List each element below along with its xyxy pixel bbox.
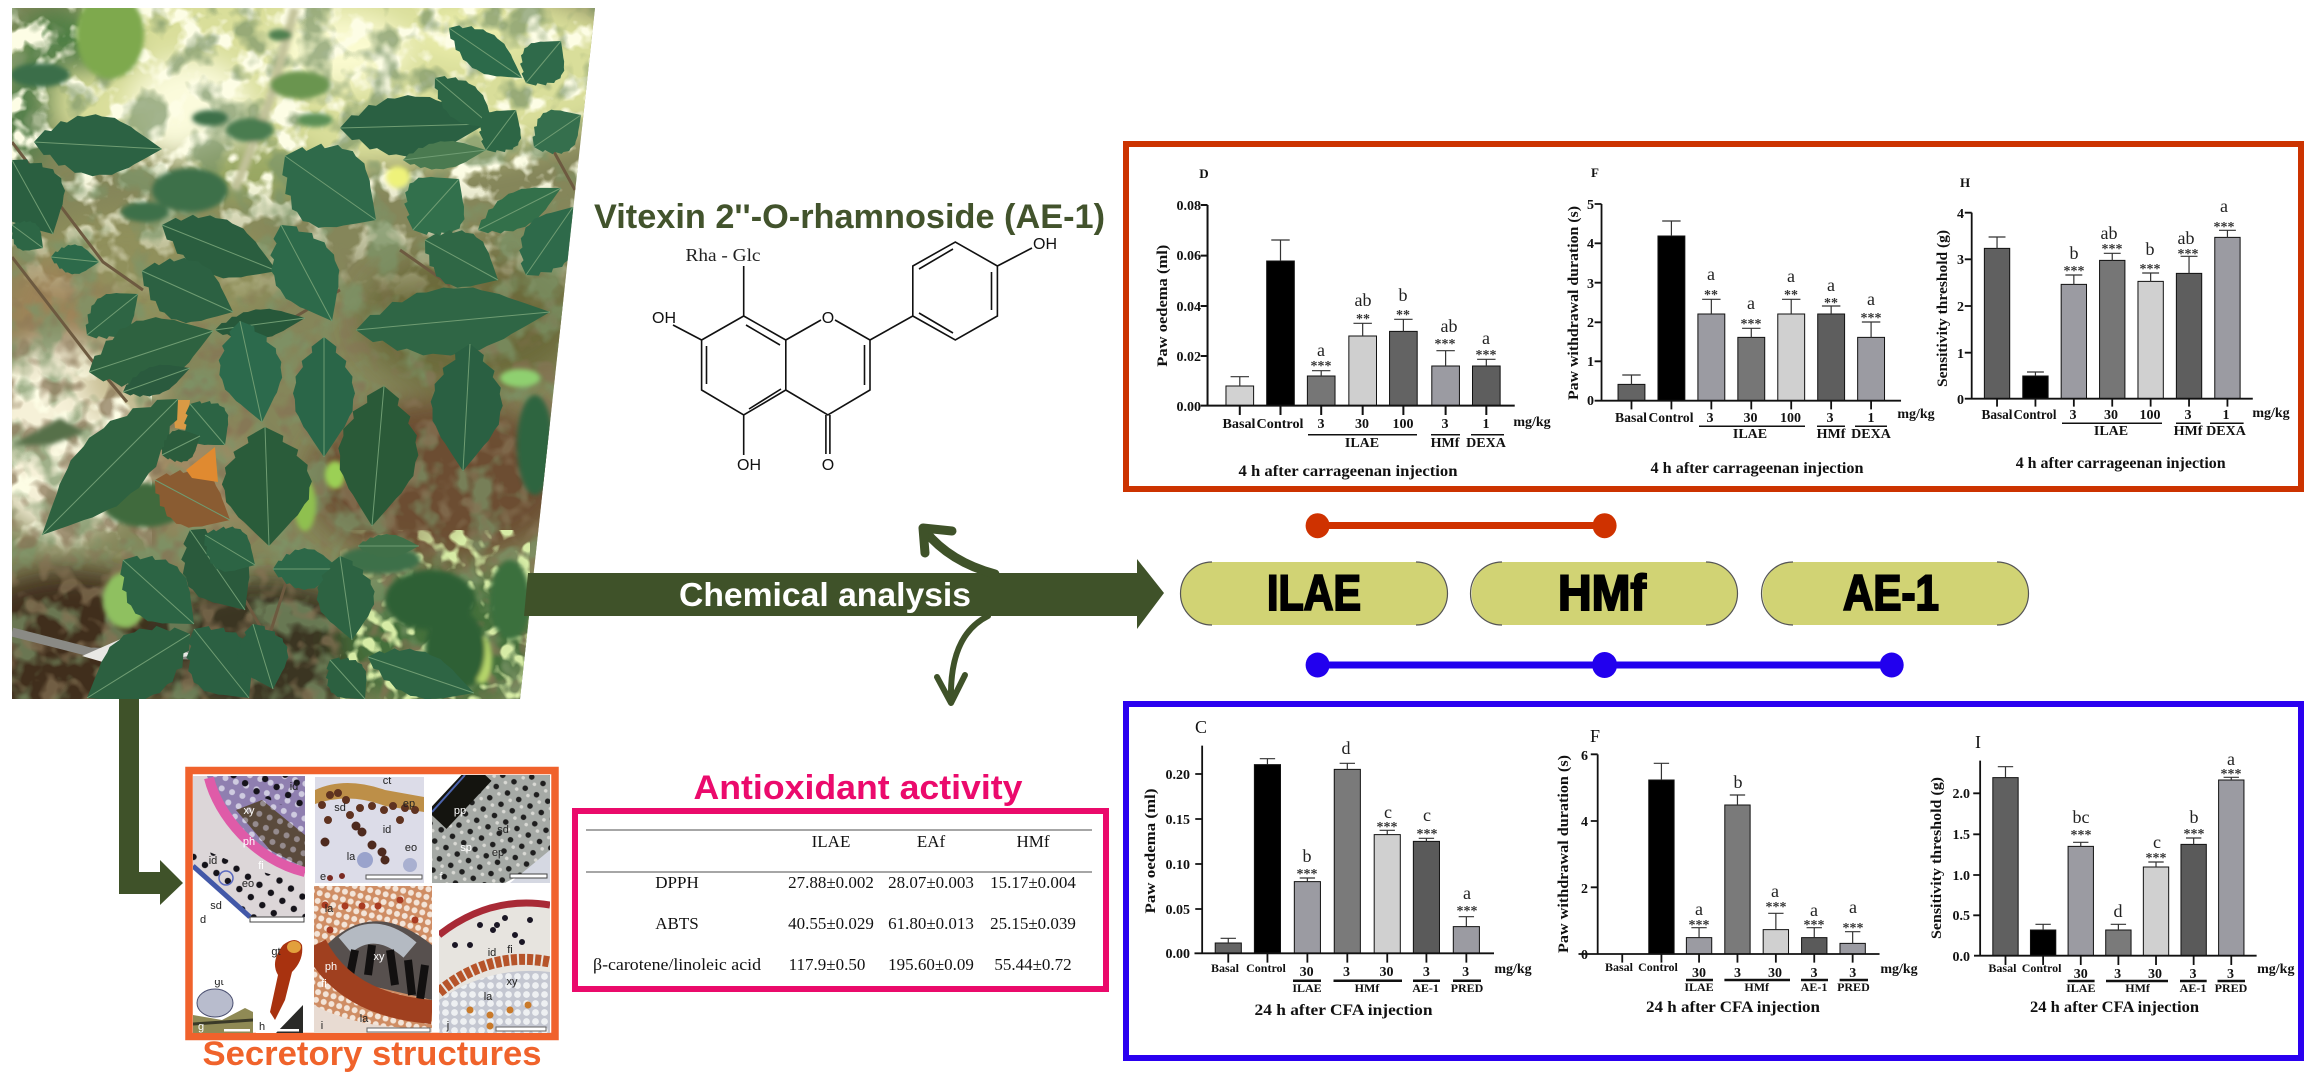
bar chart F: paw withdrawal duration: F	[1590, 726, 1600, 746]
pill: HMf: HMf	[1558, 565, 1646, 621]
chemical structure: vitexin 2''-O-rhamnoside: OH	[737, 457, 761, 474]
bar chart H: sensitivity threshold: 1	[2222, 408, 2230, 423]
bar chart I: sensitivity threshold: mg/kg	[2257, 962, 2294, 977]
panel: antioxidant activity table: 117.9±0.50	[789, 955, 865, 974]
bar chart F: paw withdrawal duration: **	[1824, 296, 1838, 311]
micrograph e	[315, 775, 424, 883]
bar chart C: paw oedema: ***	[1296, 867, 1318, 882]
arrow: photo down to secretory structures	[119, 699, 183, 905]
micrograph h: gt	[271, 946, 281, 958]
bar chart D: paw oedema: b	[1398, 285, 1408, 305]
bar chart H: sensitivity threshold: a	[2220, 196, 2228, 216]
bar chart C: paw oedema: PRED	[1451, 981, 1484, 995]
bar chart I: sensitivity threshold: 1.0	[1952, 869, 1970, 884]
bar chart I: sensitivity threshold: 3	[2227, 967, 2234, 982]
bar chart H: sensitivity threshold: 3	[1957, 253, 1964, 268]
bar chart H: sensitivity threshold: ***	[2140, 262, 2160, 277]
micrograph d: d	[200, 914, 206, 926]
panel: antioxidant activity table: ABTS	[655, 914, 699, 933]
micrograph e: ct	[383, 775, 391, 787]
bar chart F: paw withdrawal duration: 2	[1587, 316, 1594, 331]
bar chart F: paw withdrawal duration: Basal	[1605, 960, 1634, 974]
bar chart F: paw withdrawal duration: b	[1734, 772, 1742, 792]
bar chart C: paw oedema: 3	[1462, 965, 1469, 980]
bar chart F: paw withdrawal duration: 24 h after CFA injection	[1646, 999, 1820, 1016]
bar chart D: paw oedema: a	[1317, 340, 1325, 360]
bar chart H: sensitivity threshold: Control	[2014, 408, 2057, 423]
bar chart D: paw oedema: DEXA	[1466, 436, 1507, 451]
bar chart I: sensitivity threshold: Control	[2022, 961, 2062, 975]
micrograph g	[193, 976, 253, 1033]
arrow label: Chemical analysis: Chemical analysis	[679, 576, 971, 613]
bar chart F: paw withdrawal duration: 1	[1587, 355, 1594, 370]
bar chart F: paw withdrawal duration: ***	[1688, 918, 1710, 933]
bar chart F: paw withdrawal duration: ***	[1740, 317, 1762, 332]
bar chart F: paw withdrawal duration: Control	[1648, 411, 1694, 426]
arrow: curved up to molecule	[923, 528, 995, 574]
bar chart D: paw oedema: 0.04	[1176, 300, 1201, 315]
micrograph f	[432, 772, 550, 883]
bar chart F: paw withdrawal duration: a	[1827, 275, 1835, 295]
bar chart I: sensitivity threshold: ***	[2184, 827, 2204, 842]
bar chart F: paw withdrawal duration: 3	[1810, 966, 1818, 981]
bar chart F: paw withdrawal duration: **	[1704, 288, 1718, 303]
bar chart I: sensitivity threshold: AE-1	[2180, 981, 2206, 995]
bar chart C: paw oedema: HMf	[1355, 981, 1380, 995]
bar chart D: paw oedema: Paw oedema (ml)	[1155, 245, 1171, 367]
bar chart D: paw oedema: Control	[1256, 417, 1304, 432]
micrograph d: id	[209, 855, 217, 867]
bar chart H: sensitivity threshold: 3	[2184, 408, 2192, 423]
bar chart I: sensitivity threshold: Sensitivity threshold (g)	[1929, 777, 1945, 939]
bar chart F: paw withdrawal duration: Paw withdrawal duration (s)	[1556, 755, 1572, 953]
micrograph d: ph	[243, 836, 255, 848]
bar chart C: paw oedema: Paw oedema (ml)	[1143, 788, 1159, 914]
bar chart D: paw oedema: ***	[1310, 359, 1332, 374]
bar chart F: paw withdrawal duration: 6	[1581, 749, 1588, 764]
micrograph i: fi	[321, 978, 327, 990]
micrograph j: xy	[506, 976, 518, 988]
bar chart H: sensitivity threshold: ILAE	[2094, 424, 2128, 439]
bar chart C: paw oedema: 30	[1380, 965, 1394, 980]
micrograph d: sd	[210, 900, 222, 912]
panel: antioxidant activity table: ILAE	[812, 832, 850, 851]
bar chart I: sensitivity threshold	[1929, 732, 2294, 1016]
bar chart F: paw withdrawal duration: DEXA	[1851, 427, 1892, 442]
bar chart D: paw oedema: ILAE	[1345, 436, 1379, 451]
micrograph d: id	[290, 781, 298, 793]
bar chart I: sensitivity threshold: 24 h after CFA injection	[2030, 999, 2199, 1016]
bar chart D: paw oedema: ab	[1354, 290, 1372, 310]
micrograph i: xy	[374, 951, 385, 963]
bar chart I: sensitivity threshold: ***	[2070, 828, 2092, 843]
bar chart C: paw oedema: ***	[1456, 904, 1478, 919]
bar chart D: paw oedema: ***	[1434, 337, 1456, 352]
pill: AE-1	[1762, 562, 2029, 625]
bar chart I: sensitivity threshold: 2.0	[1952, 787, 1970, 802]
micrograph j: la	[484, 991, 493, 1003]
panel: secretory structures micrographs	[189, 770, 555, 1036]
bar chart H: sensitivity threshold: 100	[2140, 408, 2160, 423]
micrograph d: fi	[258, 860, 264, 872]
bar chart F: paw withdrawal duration: ***	[1804, 918, 1824, 933]
bar chart H: sensitivity threshold: ab	[2178, 228, 2194, 248]
bar chart I: sensitivity threshold: I	[1975, 732, 1981, 752]
panel: antioxidant activity table: HMf	[1016, 832, 1050, 851]
bar chart C: paw oedema: Basal	[1211, 961, 1240, 975]
bar chart D: paw oedema: 3	[1442, 417, 1448, 432]
bar chart H: sensitivity threshold: b	[2070, 243, 2078, 263]
bar chart D: paw oedema: 3	[1318, 417, 1324, 432]
chemical structure: vitexin 2''-O-rhamnoside: OH	[1033, 236, 1057, 253]
bar chart F: paw withdrawal duration: mg/kg	[1897, 407, 1935, 422]
bar chart C: paw oedema: mg/kg	[1494, 962, 1532, 977]
bar chart H: sensitivity threshold: 3	[2070, 408, 2076, 423]
micrograph e: eo	[405, 842, 417, 854]
bar chart F: paw withdrawal duration: 100	[1780, 411, 1801, 426]
micrograph j	[439, 893, 550, 1033]
panel: CFA results, blue frame	[1126, 704, 2301, 1058]
bar chart C: paw oedema: 0.15	[1166, 813, 1190, 828]
bar chart C: paw oedema: 0.05	[1166, 903, 1190, 918]
bar chart C: paw oedema: 3	[1343, 965, 1350, 980]
bar chart D: paw oedema: 100	[1392, 417, 1414, 432]
bar chart H: sensitivity threshold: ab	[2100, 223, 2118, 243]
bar chart C: paw oedema: ***	[1376, 820, 1398, 835]
panel: antioxidant activity table: β-carotene/linoleic acid	[593, 955, 762, 974]
bar chart H: sensitivity threshold: ***	[2178, 247, 2198, 262]
bar chart I: sensitivity threshold: d	[2114, 901, 2122, 921]
bar chart I: sensitivity threshold: 3	[2114, 967, 2121, 982]
bar chart F: paw withdrawal duration: ***	[1842, 921, 1864, 936]
panel: antioxidant activity table: 28.07±0.003	[888, 873, 974, 892]
bar chart D: paw oedema: ***	[1476, 348, 1496, 363]
bar chart C: paw oedema: 24 h after CFA injection	[1254, 1002, 1433, 1019]
bar chart H: sensitivity threshold: b	[2146, 239, 2154, 259]
bar chart F: paw withdrawal duration: ***	[1860, 311, 1882, 326]
bar chart D: paw oedema: 30	[1355, 417, 1369, 432]
bar chart D: paw oedema: a	[1482, 328, 1490, 348]
micrograph f: sd	[497, 824, 509, 836]
bar chart F: paw withdrawal duration: a	[1787, 266, 1795, 286]
bar chart F: paw withdrawal duration: Paw withdrawal duration (s)	[1566, 206, 1582, 400]
panel: carrageenan results, red frame	[1126, 144, 2301, 489]
bar chart H: sensitivity threshold: Sensitivity threshold (g)	[1935, 230, 1951, 387]
heading: Vitexin 2''-O-rhamnoside (AE-1): Vitexin 2''-O-rhamnoside (AE-1)	[594, 198, 1105, 236]
bar chart C: paw oedema: 0.00	[1166, 947, 1190, 962]
micrograph f: sp	[460, 842, 472, 854]
panel: antioxidant activity table: DPPH	[655, 873, 699, 892]
bar chart F: paw withdrawal duration	[1556, 726, 1918, 1016]
bar chart D: paw oedema: ab	[1440, 316, 1458, 336]
bar chart F: paw withdrawal duration: 4 h after carrageenan injection	[1650, 460, 1864, 477]
bar chart F: paw withdrawal duration: 3	[1849, 966, 1856, 981]
chemical structure: vitexin 2''-O-rhamnoside: O	[822, 457, 834, 474]
bar chart C: paw oedema: 0.10	[1166, 858, 1190, 873]
panel: antioxidant activity table: 61.80±0.013	[888, 914, 974, 933]
bar chart F: paw withdrawal duration: 2	[1581, 882, 1588, 897]
bar chart F: paw withdrawal duration: Basal	[1615, 411, 1647, 426]
micrograph e: id	[383, 824, 391, 836]
bar chart F: paw withdrawal duration: 0	[1587, 394, 1594, 409]
bar chart D: paw oedema: 4 h after carrageenan injection	[1238, 463, 1458, 480]
bar chart H: sensitivity threshold: 4 h after carrageenan injection	[2016, 455, 2226, 472]
bar chart F: paw withdrawal duration: Control	[1638, 960, 1679, 974]
bar chart H: sensitivity threshold: H	[1960, 175, 1970, 190]
bar chart I: sensitivity threshold: 30	[2074, 967, 2088, 982]
bar chart C: paw oedema	[1143, 717, 1532, 1019]
bar chart F: paw withdrawal duration: 0	[1581, 948, 1588, 963]
bar chart F: paw withdrawal duration: PRED	[1837, 980, 1870, 994]
chemical structure: vitexin 2''-O-rhamnoside: O	[822, 310, 834, 327]
bar chart I: sensitivity threshold: 30	[2148, 967, 2162, 982]
micrograph g: g	[198, 1021, 204, 1033]
micrograph i	[314, 886, 432, 1033]
bar chart H: sensitivity threshold: Basal	[1982, 408, 2013, 423]
bar chart I: sensitivity threshold: Basal	[1988, 961, 2017, 975]
bar chart F: paw withdrawal duration: HMf	[1817, 427, 1846, 442]
panel: antioxidant activity table: EAf	[917, 832, 945, 851]
bar chart H: sensitivity threshold: DEXA	[2206, 424, 2247, 439]
bar chart C: paw oedema: a	[1463, 883, 1471, 903]
micrograph i: la	[360, 1013, 369, 1025]
bar chart F: paw withdrawal duration: 3	[1587, 277, 1594, 292]
bar chart I: sensitivity threshold: 1.5	[1952, 828, 1970, 843]
bar chart F: paw withdrawal duration: HMf	[1744, 980, 1770, 994]
bar chart F: paw withdrawal duration: a	[1867, 289, 1875, 309]
bar chart I: sensitivity threshold: bc	[2072, 807, 2090, 827]
micrograph g: gt	[214, 976, 224, 988]
bar chart F: paw withdrawal duration: AE-1	[1801, 980, 1827, 994]
bar chart C: paw oedema: 30	[1300, 965, 1314, 980]
bar chart C: paw oedema: c	[1384, 802, 1392, 822]
micrograph j: fi	[507, 944, 513, 956]
bar chart C: paw oedema: 3	[1423, 965, 1430, 980]
bar chart F: paw withdrawal duration: 1	[1868, 411, 1874, 426]
bar chart F: paw withdrawal duration: a	[1771, 881, 1779, 901]
micrograph f: ep	[492, 847, 504, 859]
micrograph j: j	[446, 1020, 449, 1032]
bar chart C: paw oedema: b	[1302, 846, 1312, 866]
bar chart F: paw withdrawal duration: a	[1695, 899, 1703, 919]
bar chart F: paw withdrawal duration: 4	[1581, 815, 1588, 830]
bar chart H: sensitivity threshold: ***	[2064, 264, 2084, 279]
panel: antioxidant activity table: 25.15±0.039	[990, 914, 1076, 933]
bar chart F: paw withdrawal duration: a	[1810, 900, 1818, 920]
panel: antioxidant activity table: 15.17±0.004	[990, 873, 1076, 892]
micrograph d	[193, 776, 305, 926]
bar chart F: paw withdrawal duration: 3	[1706, 411, 1714, 426]
pill: HMf	[1470, 562, 1738, 625]
bar chart C: paw oedema: Control	[1246, 961, 1287, 975]
bar chart H: sensitivity threshold: ***	[2214, 220, 2234, 235]
bar chart F: paw withdrawal duration: F	[1591, 165, 1599, 180]
bar chart I: sensitivity threshold: 0.0	[1952, 950, 1970, 965]
bar chart H: sensitivity threshold: 30	[2104, 408, 2118, 423]
micrograph d: xy	[244, 805, 255, 817]
bar chart C: paw oedema: c	[1423, 805, 1431, 825]
bar chart F: paw withdrawal duration: a	[1707, 264, 1715, 284]
panel: antioxidant activity table: 27.88±0.002	[788, 873, 874, 892]
bar chart F: paw withdrawal duration: 30	[1692, 966, 1706, 981]
micrograph e: ep	[403, 798, 415, 810]
micrograph e: la	[347, 851, 356, 863]
bar chart C: paw oedema: ILAE	[1292, 981, 1322, 995]
micrograph i: la	[325, 903, 334, 915]
pill: ILAE	[1181, 562, 1448, 625]
panel: antioxidant activity table	[575, 811, 1106, 989]
bar chart D: paw oedema: 0.02	[1176, 350, 1201, 365]
bar chart F: paw withdrawal duration: 3	[1734, 966, 1741, 981]
bar chart D: paw oedema: mg/kg	[1513, 415, 1551, 430]
micrograph d: eo	[242, 878, 254, 890]
arrow: chemical analysis main arrow	[524, 559, 1164, 629]
bar chart I: sensitivity threshold: ILAE	[2066, 981, 2095, 995]
bar chart F: paw withdrawal duration: 3	[1826, 411, 1834, 426]
bar chart I: sensitivity threshold: 3	[2190, 967, 2196, 982]
bar chart D: paw oedema: D	[1199, 166, 1209, 181]
bar chart H: sensitivity threshold: 2	[1957, 300, 1964, 315]
bar chart F: paw withdrawal duration: mg/kg	[1880, 962, 1918, 977]
bar chart D: paw oedema	[1155, 166, 1551, 480]
arrow: curved down to antioxidant activity	[937, 616, 988, 703]
panel: antioxidant activity table: 55.44±0.72	[994, 955, 1072, 974]
bar chart D: paw oedema: 1	[1482, 417, 1490, 432]
bar chart I: sensitivity threshold: c	[2153, 832, 2161, 852]
bar chart F: paw withdrawal duration: a	[1849, 897, 1857, 917]
bar chart I: sensitivity threshold: 0.5	[1952, 909, 1970, 924]
micrograph j: id	[488, 947, 496, 959]
connector: red ILAE to HMf	[1306, 513, 1617, 538]
bar chart F: paw withdrawal duration: ***	[1766, 900, 1786, 915]
bar chart F: paw withdrawal duration: 30	[1768, 966, 1782, 981]
label: sugar substituent: Rha - Glc	[686, 245, 761, 265]
heading: Antioxidant activity: Antioxidant activity	[694, 769, 1023, 807]
micrograph i: ph	[325, 961, 337, 973]
chemical structure: vitexin 2''-O-rhamnoside: OH	[652, 310, 676, 327]
bar chart F: paw withdrawal duration: ILAE	[1684, 980, 1714, 994]
bar chart D: paw oedema: 0.06	[1176, 249, 1201, 264]
panel: antioxidant activity table: 195.60±0.09	[888, 955, 974, 974]
bar chart F: paw withdrawal duration: 30	[1744, 411, 1758, 426]
pill: AE-1: AE-1	[1843, 565, 1939, 621]
bar chart H: sensitivity threshold: 1	[1957, 347, 1964, 362]
bar chart D: paw oedema: **	[1396, 308, 1410, 323]
micrograph i: i	[321, 1020, 323, 1032]
micrograph h: h	[259, 1021, 265, 1033]
pill: ILAE: ILAE	[1267, 565, 1361, 621]
bar chart I: sensitivity threshold: HMf	[2125, 981, 2151, 995]
photo: plant foliage	[12, 8, 595, 699]
bar chart H: sensitivity threshold: mg/kg	[2252, 406, 2290, 421]
micrograph e: e	[320, 871, 326, 883]
bar chart H: sensitivity threshold: ***	[2102, 242, 2122, 257]
bar chart I: sensitivity threshold: b	[2190, 807, 2198, 827]
bar chart F: paw withdrawal duration: a	[1747, 293, 1755, 313]
micrograph f: pp	[454, 805, 466, 817]
bar chart I: sensitivity threshold: ***	[2146, 851, 2166, 866]
bar chart I: sensitivity threshold: a	[2227, 749, 2235, 769]
bar chart F: paw withdrawal duration: ILAE	[1733, 427, 1767, 442]
panel: antioxidant activity table: 40.55±0.029	[788, 914, 874, 933]
micrograph h	[256, 938, 303, 1033]
bar chart F: paw withdrawal duration	[1566, 165, 1935, 477]
bar chart D: paw oedema: 0.00	[1176, 400, 1201, 415]
bar chart C: paw oedema: AE-1	[1412, 981, 1439, 995]
connector: blue ILAE to HMf to AE-1	[1306, 652, 1904, 678]
bar chart D: paw oedema: **	[1356, 312, 1370, 327]
bar chart F: paw withdrawal duration: 5	[1587, 198, 1594, 213]
bar chart H: sensitivity threshold	[1935, 175, 2290, 472]
bar chart I: sensitivity threshold: ***	[2220, 767, 2242, 782]
bar chart H: sensitivity threshold: HMf	[2174, 424, 2203, 439]
bar chart F: paw withdrawal duration: 4	[1587, 237, 1594, 252]
bar chart C: paw oedema: d	[1342, 738, 1350, 758]
micrograph e: sd	[334, 802, 346, 814]
chemical structure: vitexin 2''-O-rhamnoside	[652, 236, 1057, 474]
bar chart H: sensitivity threshold: 0	[1957, 393, 1964, 408]
bar chart I: sensitivity threshold: PRED	[2215, 981, 2248, 995]
bar chart D: paw oedema: HMf	[1431, 436, 1460, 451]
bar chart C: paw oedema: C	[1195, 717, 1207, 737]
bar chart C: paw oedema: ***	[1416, 827, 1438, 842]
bar chart D: paw oedema: Basal	[1222, 417, 1256, 432]
bar chart H: sensitivity threshold: 4	[1957, 207, 1964, 222]
bar chart C: paw oedema: 0.20	[1166, 768, 1190, 783]
heading: Secretory structures: Secretory structures	[202, 1035, 542, 1073]
bar chart F: paw withdrawal duration: **	[1784, 288, 1798, 303]
bar chart D: paw oedema: 0.08	[1176, 199, 1201, 214]
micrograph f: f	[439, 871, 443, 883]
